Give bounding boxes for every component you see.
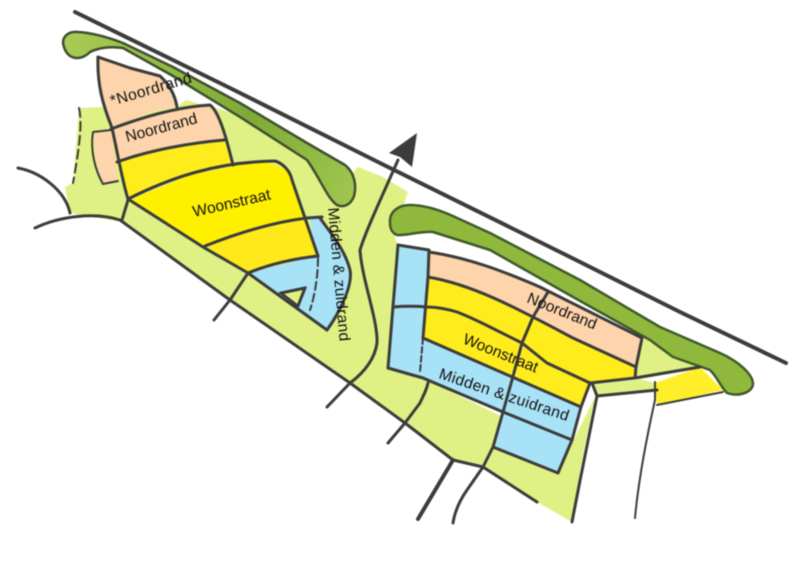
arrow head	[389, 133, 417, 167]
green strip: north-west	[63, 32, 355, 206]
left plot: green triangle in blue	[281, 288, 305, 306]
label: Midden & zuidrand right: Midden & zuidrand	[437, 366, 571, 425]
left plot: yellow Woonstraat	[130, 161, 306, 246]
right plot: blue left	[388, 245, 582, 473]
left plot: peach side	[93, 130, 118, 184]
right plot: peach Noordrand	[428, 252, 642, 367]
label: Woonstraat left: Woonstraat	[191, 186, 273, 221]
left plot: blue	[248, 218, 351, 330]
east plot: yellow	[655, 367, 723, 405]
left plot: yellow lower	[205, 219, 316, 273]
label: Noordrand right: Noordrand	[525, 290, 599, 333]
light green ground	[65, 100, 702, 522]
right plot: yellow Woonstraat	[423, 277, 636, 407]
left plot: peach *Noordrand	[98, 57, 177, 128]
label: Noordrand left: Noordrand	[124, 110, 199, 146]
left plot: yellow upper	[118, 140, 233, 199]
green strip: south-east	[390, 205, 753, 395]
label: Woonstraat right: Woonstraat	[461, 331, 541, 377]
label: *Noordrand: *Noordrand	[108, 70, 194, 110]
left plot: peach Noordrand	[111, 105, 224, 162]
label: Midden & zuidrand left: Midden & zuidrand	[324, 207, 353, 342]
